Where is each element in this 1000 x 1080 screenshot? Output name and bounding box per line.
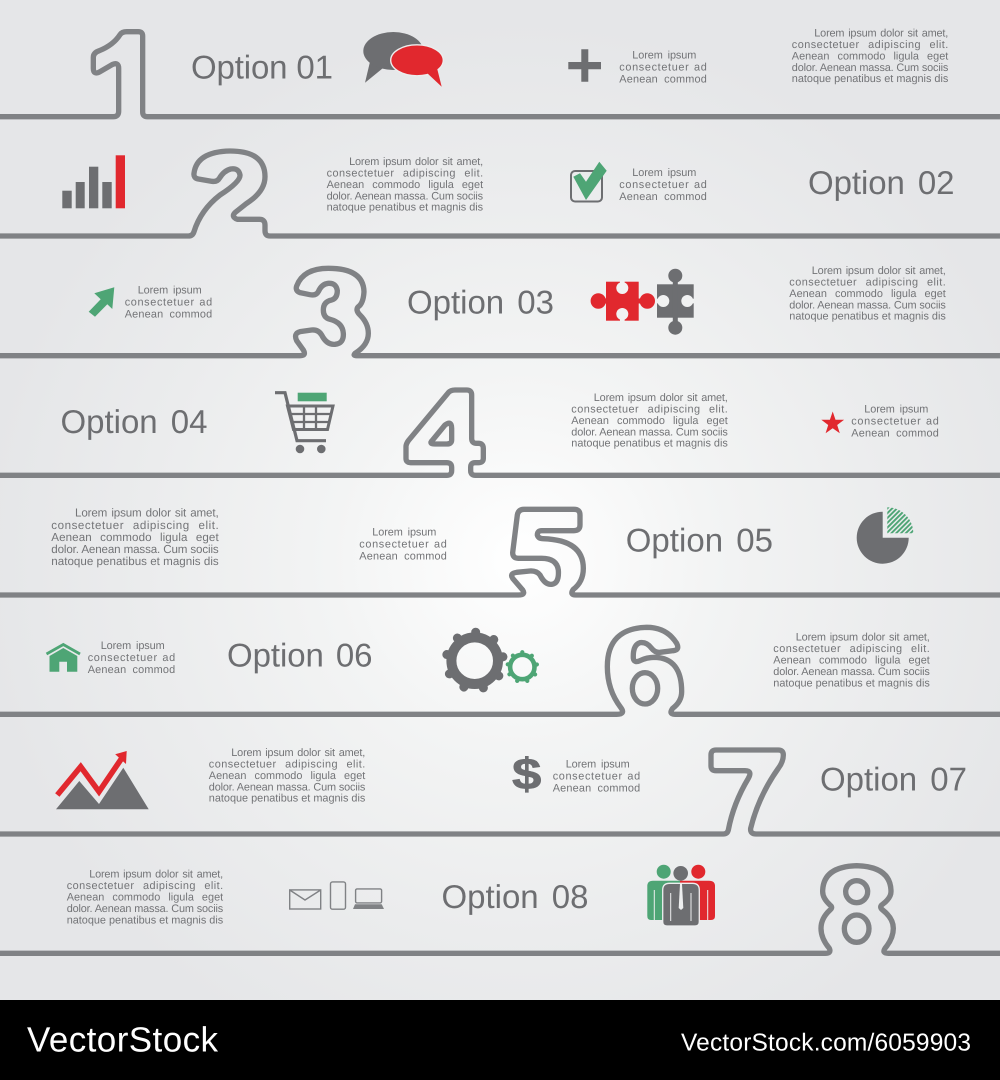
panel: option 03 row bbox=[0, 265, 1000, 356]
text: short note: Lorem ipsum bbox=[632, 49, 696, 61]
text: short note: consectetuer ad bbox=[619, 179, 707, 191]
numeral 6 line bbox=[0, 627, 1000, 714]
text: paragraph: consectetuer adipiscing elit. bbox=[792, 39, 948, 51]
text: short note bbox=[619, 167, 707, 203]
text: paragraph: dolor. Aenean massa. Cum sociis bbox=[571, 426, 728, 438]
text: paragraph: natoque penatibus et magnis dis bbox=[327, 202, 484, 214]
icon: dollar sign: $ bbox=[512, 750, 541, 799]
panel: option 08 row bbox=[0, 865, 1000, 953]
heading: option 04: Option 04 bbox=[60, 403, 208, 440]
numeral 8 line bbox=[0, 866, 1000, 953]
numeral 4 line bbox=[0, 390, 1000, 475]
icon: pie chart bbox=[857, 507, 913, 564]
icon: puzzle pieces bbox=[591, 269, 694, 335]
icon: star bbox=[821, 412, 844, 433]
footer logo text: VectorStock bbox=[27, 1021, 218, 1060]
text: paragraph: dolor. Aenean massa. Cum sociis bbox=[773, 666, 930, 678]
text: paragraph: Aenean commodo ligula eget bbox=[792, 50, 948, 62]
text: paragraph bbox=[327, 156, 484, 214]
panel: option 07 row bbox=[0, 747, 1000, 834]
text: paragraph: Aenean commodo ligula eget bbox=[789, 288, 946, 300]
icon: arrow bbox=[89, 287, 114, 317]
text: paragraph: Lorem ipsum dolor sit amet, bbox=[89, 869, 223, 881]
text: short note: Lorem ipsum bbox=[372, 527, 436, 539]
text: short note bbox=[619, 49, 707, 85]
text: short note: consectetuer ad bbox=[619, 61, 707, 73]
text: short note: Aenean commod bbox=[553, 782, 640, 794]
icon: bar chart bbox=[62, 155, 125, 208]
text: short note: Lorem ipsum bbox=[864, 404, 928, 416]
icon: speech bubbles bbox=[363, 32, 443, 87]
text: paragraph: natoque penatibus et magnis dis bbox=[571, 438, 728, 450]
text: short note: Aenean commod bbox=[851, 428, 939, 440]
text: short note bbox=[851, 404, 939, 440]
text: short note bbox=[553, 758, 640, 794]
text: short note bbox=[125, 284, 212, 320]
text: paragraph bbox=[789, 265, 946, 323]
text: paragraph: natoque penatibus et magnis dis bbox=[209, 793, 366, 805]
icon: business people bbox=[647, 865, 715, 926]
panel: option 05 row bbox=[0, 507, 1000, 595]
icon: shopping cart bbox=[275, 393, 333, 453]
heading: option 01: Option 01 bbox=[191, 48, 333, 85]
heading: option 08: Option 08 bbox=[442, 878, 588, 915]
text: paragraph: Aenean commodo ligula eget bbox=[327, 179, 483, 191]
text: paragraph: Lorem ipsum dolor sit amet, bbox=[594, 392, 728, 404]
numeral 7 line bbox=[0, 750, 1000, 834]
heading: option 07: Option 07 bbox=[820, 761, 967, 798]
icon: gears bbox=[445, 631, 537, 690]
text: paragraph: dolor. Aenean massa. Cum sociis bbox=[792, 62, 949, 74]
text: paragraph: natoque penatibus et magnis dis bbox=[773, 677, 930, 689]
numeral 3 line bbox=[0, 268, 1000, 356]
text: short note: Aenean commod bbox=[619, 73, 707, 85]
text: short note: Aenean commod bbox=[125, 308, 212, 320]
footer image reference: VectorStock.com/6059903 bbox=[681, 1030, 971, 1057]
heading: option 03: Option 03 bbox=[407, 284, 554, 320]
text: paragraph: Aenean commodo ligula eget bbox=[773, 655, 930, 667]
icon: checkbox with tick bbox=[571, 162, 607, 202]
panel: option 06 row bbox=[0, 627, 1000, 714]
text: paragraph: natoque penatibus et magnis dis bbox=[792, 73, 949, 85]
icon: plus bbox=[568, 49, 601, 82]
panel: option 01 row bbox=[0, 28, 1000, 117]
text: short note: Lorem ipsum bbox=[138, 284, 202, 296]
text: paragraph: dolor. Aenean massa. Cum sociis bbox=[789, 299, 946, 311]
text: short note: Aenean commod bbox=[359, 551, 447, 563]
numeral 5 line bbox=[0, 509, 1000, 595]
text: paragraph: Lorem ipsum dolor sit amet, bbox=[231, 747, 365, 759]
text: paragraph bbox=[571, 392, 728, 450]
text: paragraph: Lorem ipsum dolor sit amet, bbox=[814, 28, 948, 40]
text: paragraph: consectetuer adipiscing elit. bbox=[67, 880, 223, 892]
text: paragraph: Aenean commodo ligula eget bbox=[51, 531, 219, 544]
text: short note: Aenean commod bbox=[88, 664, 175, 676]
heading: option 05: Option 05 bbox=[626, 522, 773, 559]
text: paragraph: dolor. Aenean massa. Cum sociis bbox=[327, 190, 484, 202]
text: paragraph: Lorem ipsum dolor sit amet, bbox=[812, 265, 946, 277]
text: paragraph: consectetuer adipiscing elit. bbox=[789, 276, 946, 288]
footer bar bbox=[0, 1000, 1000, 1080]
text: paragraph bbox=[792, 28, 949, 85]
heading: option 02: Option 02 bbox=[808, 164, 954, 201]
text: short note bbox=[88, 640, 175, 676]
text: short note: consectetuer ad bbox=[851, 416, 939, 428]
numeral 2 line bbox=[0, 151, 1000, 236]
text: paragraph: consectetuer adipiscing elit. bbox=[773, 643, 930, 655]
text: paragraph: consectetuer adipiscing elit. bbox=[571, 404, 728, 416]
text: paragraph bbox=[773, 632, 930, 689]
text: short note: consectetuer ad bbox=[125, 296, 212, 308]
text: short note: Lorem ipsum bbox=[566, 758, 630, 770]
text: short note: Aenean commod bbox=[619, 191, 707, 203]
text: paragraph: dolor. Aenean massa. Cum sociis bbox=[209, 781, 366, 793]
numeral 1 line bbox=[0, 32, 1000, 117]
text: paragraph: natoque penatibus et magnis dis bbox=[789, 311, 946, 323]
text: paragraph: dolor. Aenean massa. Cum sociis bbox=[51, 543, 219, 556]
text: short note: Lorem ipsum bbox=[101, 640, 165, 652]
text: paragraph: consectetuer adipiscing elit. bbox=[327, 168, 483, 180]
text: short note: consectetuer ad bbox=[88, 652, 175, 664]
text: paragraph: consectetuer adipiscing elit. bbox=[209, 758, 365, 770]
text: paragraph: natoque penatibus et magnis dis bbox=[67, 914, 224, 926]
text: short note: Lorem ipsum bbox=[632, 167, 696, 179]
text: paragraph: natoque penatibus et magnis dis bbox=[51, 555, 219, 568]
text: paragraph bbox=[51, 507, 219, 568]
text: short note bbox=[359, 527, 447, 563]
text: paragraph: Lorem ipsum dolor sit amet, bbox=[75, 507, 219, 520]
icon: envelope, phone and laptop bbox=[290, 882, 384, 909]
heading: option 06: Option 06 bbox=[227, 637, 372, 674]
text: paragraph: Aenean commodo ligula eget bbox=[209, 770, 365, 782]
text: paragraph: consectetuer adipiscing elit. bbox=[51, 519, 219, 532]
panel: option 04 row bbox=[0, 390, 1000, 475]
icon: mountain growth chart bbox=[56, 751, 149, 809]
text: paragraph: Lorem ipsum dolor sit amet, bbox=[796, 632, 930, 644]
text: paragraph: Aenean commodo ligula eget bbox=[571, 415, 728, 427]
text: paragraph: Aenean commodo ligula eget bbox=[67, 892, 223, 904]
text: short note: consectetuer ad bbox=[553, 770, 640, 782]
text: paragraph: dolor. Aenean massa. Cum sociis bbox=[67, 903, 224, 915]
text: short note: consectetuer ad bbox=[359, 539, 447, 551]
text: paragraph: Lorem ipsum dolor sit amet, bbox=[349, 156, 483, 168]
text: paragraph bbox=[67, 869, 224, 926]
panel: option 02 row bbox=[0, 151, 1000, 236]
text: paragraph bbox=[209, 747, 366, 805]
icon: house bbox=[46, 644, 80, 672]
